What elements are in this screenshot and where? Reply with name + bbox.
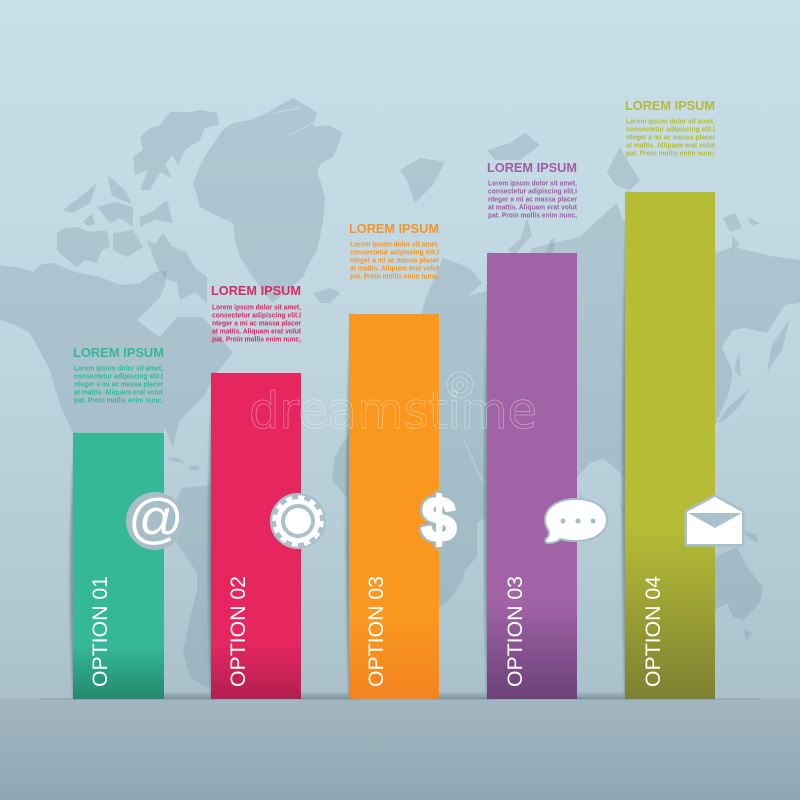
heading: option 03 purple: LOREM IPSUM [487, 160, 577, 175]
text block: option 03 orange [350, 242, 440, 280]
bar: option 02 [211, 373, 301, 699]
text block: option 01 [74, 366, 164, 404]
ground line [40, 698, 760, 700]
bar: option 03 purple [487, 253, 577, 699]
map: Arctic islands [57, 110, 219, 303]
text block: option 02: pat. Proin mollis enim nunc, [212, 336, 301, 344]
text block: option 02: nteger a mi ac massa placer [212, 320, 301, 328]
heading: option 02: LOREM IPSUM [211, 283, 301, 298]
text block: option 03 purple: consectetur adipiscing elit.I [488, 188, 577, 196]
heading: option 04: LOREM IPSUM [625, 98, 715, 113]
text block: option 01: nteger a mi ac massa placer [74, 382, 163, 388]
text block: option 01: pat. Proin mollis enim nunc, [74, 398, 163, 404]
world map [0, 98, 800, 688]
panel: option 03 purple [487, 160, 578, 699]
text block: option 03 orange: nteger a mi ac massa placer [350, 258, 439, 264]
map: Siberian islands [723, 213, 760, 250]
text block: option 01: consectetur adipiscing elit.I [74, 374, 163, 380]
text block: option 03 orange: pat. Proin mollis enim nunc, [350, 274, 439, 280]
map: Eurasia and Africa [332, 203, 800, 607]
map: Caribbean islands [167, 457, 200, 470]
label: option 03 orange: OPTION 03 [364, 576, 388, 687]
text block: option 02 [212, 304, 302, 344]
icon: envelope [687, 497, 742, 544]
text block: option 04: pat. Proin mollis enim nunc, [626, 150, 715, 158]
text block: option 03 purple: at mattis. Aliquam erat volut [488, 204, 578, 212]
text block: option 01: Lorem ipsum dolor sit amet, [74, 366, 163, 372]
text block: option 02: consectetur adipiscing elit.I [212, 312, 301, 320]
map: Greenland [193, 98, 343, 303]
text block: option 03 purple [488, 180, 578, 220]
text block: option 03 purple: Lorem ipsum dolor sit amet, [488, 180, 577, 188]
label: option 04: OPTION 04 [641, 576, 665, 687]
panel: option 03 orange [349, 221, 440, 699]
map: Australia [715, 530, 763, 640]
text block: option 03 orange: consectetur adipiscing elit.I [350, 250, 439, 256]
label: option 03 purple: OPTION 03 [503, 576, 527, 687]
ground shadow [164, 691, 715, 699]
panel: option 01 [73, 345, 164, 699]
heading: option 03 orange: LOREM IPSUM [349, 221, 439, 236]
bar: option 03 orange [349, 314, 439, 699]
map: Greenland fjords [212, 108, 315, 145]
panel: option 04 [625, 98, 716, 699]
ground band [0, 699, 800, 800]
panel: option 02 [211, 283, 302, 699]
map: Iceland [313, 288, 340, 303]
icon: speech bubble [546, 500, 606, 542]
label: option 02: OPTION 02 [226, 576, 250, 687]
icon: at sign: @ [127, 487, 183, 549]
text block: option 04: Lorem ipsum dolor sit amet, [626, 118, 715, 126]
bar: option 04 [625, 192, 715, 699]
text block: option 03 purple: pat. Proin mollis enim nunc, [488, 212, 577, 220]
bar shadows [70, 192, 630, 699]
text block: option 03 orange: Lorem ipsum dolor sit amet, [350, 242, 439, 248]
map: North America [0, 263, 233, 462]
text block: option 03 orange: at mattis. Aliquam erat volut [350, 266, 440, 272]
text block: option 04: consectetur adipiscing elit.I [626, 126, 715, 134]
bar: option 01 [73, 433, 164, 699]
text block: option 04: at mattis. Aliquam erat volut [626, 142, 716, 150]
icon: gear [274, 497, 322, 545]
text block: option 02: at mattis. Aliquam erat volut [212, 328, 302, 336]
map: Sri Lanka and Sumatra [579, 493, 625, 517]
map: South America [172, 485, 295, 688]
text block: option 03 purple: nteger a mi ac massa placer [488, 196, 577, 204]
text block: option 04: nteger a mi ac massa placer [626, 134, 715, 142]
text block: option 01: at mattis. Aliquam erat volut [74, 390, 164, 396]
icon: dollar sign: $ [422, 486, 456, 555]
label: option 01: OPTION 01 [88, 576, 112, 687]
text block: option 02: Lorem ipsum dolor sit amet, [212, 304, 301, 312]
map: Red Sea [463, 438, 484, 484]
map: Svalbard and northern islands [400, 133, 640, 255]
text block: option 04 [626, 118, 716, 158]
map: Japan and Sakhalin [717, 318, 790, 423]
icon: dollar sign: $ [422, 486, 456, 555]
watermark: dreamstime [249, 382, 537, 440]
heading: option 01: LOREM IPSUM [73, 345, 164, 360]
